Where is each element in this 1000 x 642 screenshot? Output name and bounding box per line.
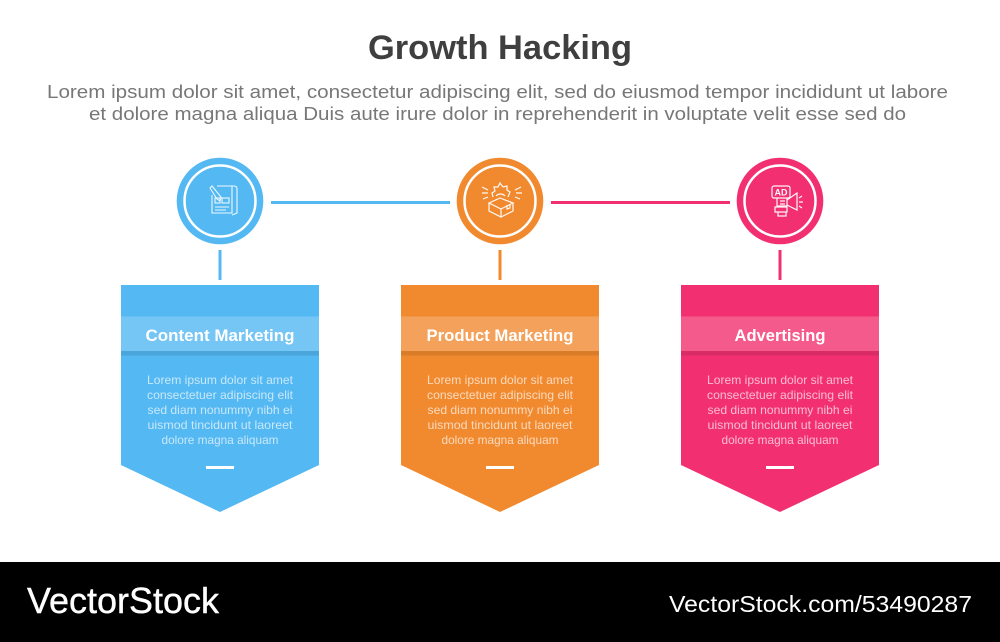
heading: Advertising: [734, 327, 826, 345]
band shadow: [121, 351, 319, 356]
body text: uismod tincidunt ut laoreet: [428, 418, 573, 432]
stem: [218, 250, 222, 280]
dash: [486, 466, 514, 469]
connector: blue line: [271, 201, 450, 204]
subtitle: et dolore magna aliqua Duis aute irure dolor in reprehenderit in voluptate velit esse sed do: [89, 104, 906, 124]
header band: [401, 316, 599, 351]
circle: inner ring: [464, 166, 536, 236]
band shadow: [681, 351, 879, 356]
body text: consectetuer adipiscing elit: [707, 388, 854, 402]
body text: consectetuer adipiscing elit: [147, 388, 294, 402]
dash: [766, 466, 794, 469]
card: [681, 285, 879, 512]
body text: consectetuer adipiscing elit: [427, 388, 574, 402]
title: Growth Hacking: [368, 29, 632, 67]
body text: Lorem ipsum dolor sit amet: [707, 373, 854, 387]
step 2: product marketing: [401, 158, 599, 512]
subtitle: [47, 82, 948, 124]
icon: box with gear: [482, 183, 522, 217]
stem: [498, 250, 502, 280]
body text: [707, 373, 854, 447]
icon: document with pencil: [210, 186, 237, 215]
footer url: VectorStock.com/53490287: [669, 591, 972, 617]
step 3: advertising: [681, 158, 879, 512]
body text: dolore magna aliquam: [442, 433, 558, 447]
card: [401, 285, 599, 512]
body text: sed diam nonummy nibh ei: [148, 403, 292, 417]
footer bar: [0, 562, 1000, 642]
body text: uismod tincidunt ut laoreet: [148, 418, 293, 432]
body text: dolore magna aliquam: [722, 433, 838, 447]
body text: sed diam nonummy nibh ei: [708, 403, 852, 417]
heading: Content Marketing: [146, 327, 294, 345]
icon: AD megaphone: AD: [774, 188, 788, 198]
circle: pink: [737, 158, 823, 244]
footer logo: VectorStock: [27, 580, 220, 621]
body text: uismod tincidunt ut laoreet: [708, 418, 853, 432]
header band: [681, 316, 879, 351]
stem: [778, 250, 782, 280]
body text: Lorem ipsum dolor sit amet: [147, 373, 294, 387]
body text: dolore magna aliquam: [162, 433, 278, 447]
circle: orange: [457, 158, 543, 244]
card: [121, 285, 319, 512]
band shadow: [401, 351, 599, 356]
dash: [206, 466, 234, 469]
circle: inner ring: [184, 166, 256, 236]
heading: Product Marketing: [426, 327, 574, 345]
body text: sed diam nonummy nibh ei: [428, 403, 572, 417]
subtitle: Lorem ipsum dolor sit amet, consectetur adipiscing elit, sed do eiusmod tempor incididunt ut labore: [47, 82, 948, 102]
body text: [147, 373, 294, 447]
header band: [121, 316, 319, 351]
circle: inner ring: [744, 166, 816, 236]
body text: Lorem ipsum dolor sit amet: [427, 373, 574, 387]
circle: blue: [177, 158, 263, 244]
connector: pink line: [551, 201, 730, 204]
step 1: content marketing: [121, 158, 319, 512]
icon: AD megaphone: [772, 186, 803, 216]
body text: [427, 373, 574, 447]
